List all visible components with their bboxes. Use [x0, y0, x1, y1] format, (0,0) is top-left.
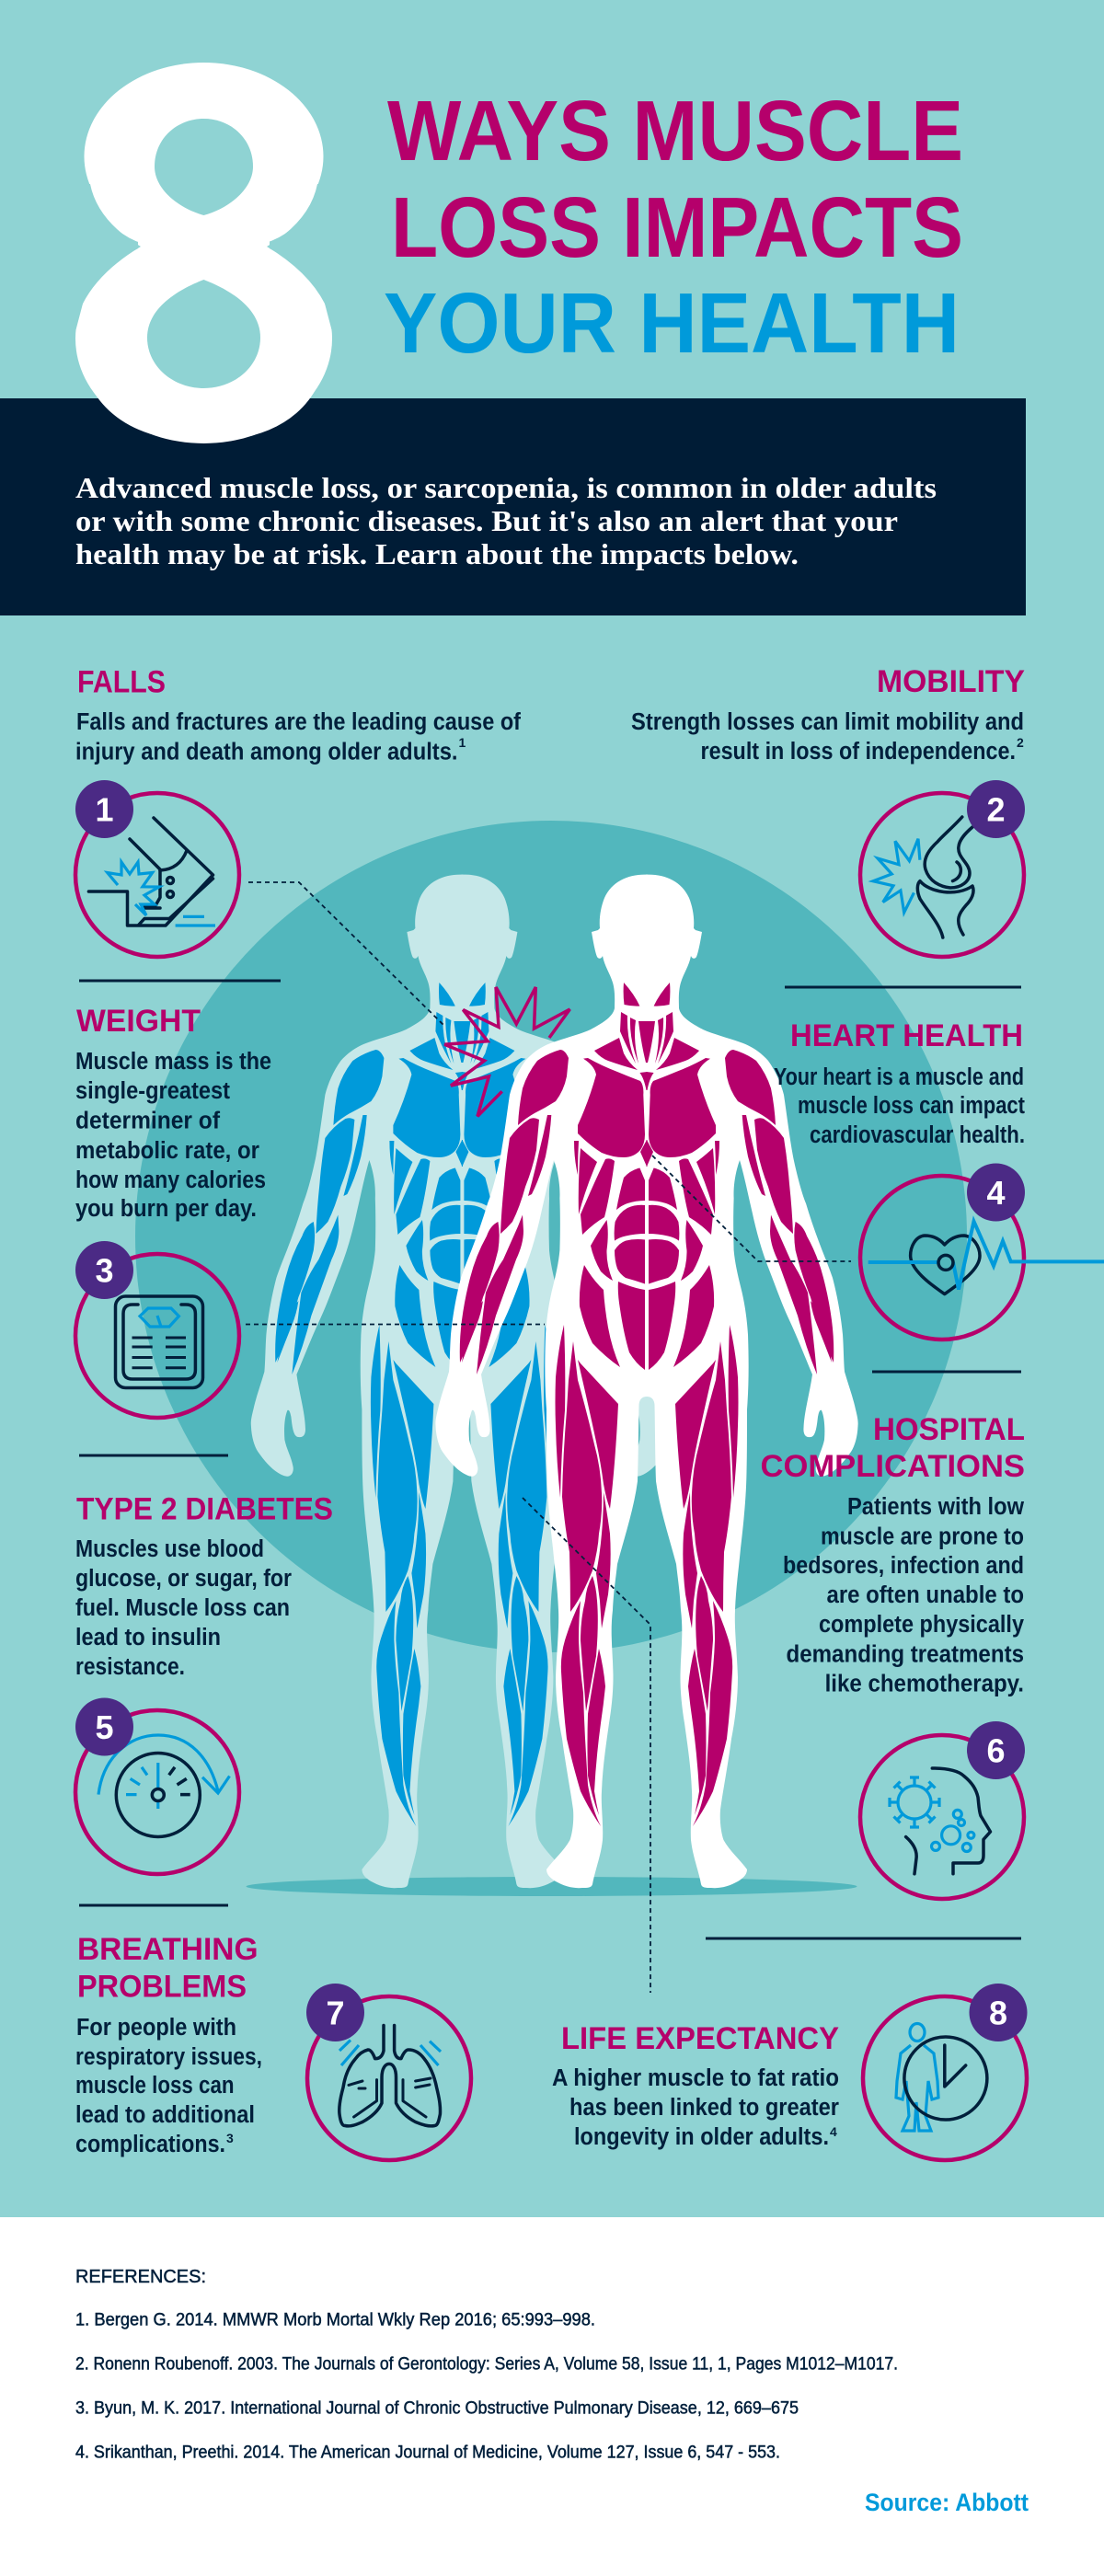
text: type 2 diabetes: resistance.	[75, 1654, 185, 1680]
text: life expectancy: 4	[830, 2124, 837, 2139]
heading: hospital complications	[760, 1412, 1025, 1484]
heading: mobility: MOBILITY	[877, 664, 1025, 699]
panel: type 2 diabetes	[75, 1492, 333, 1874]
title: YOUR HEALTH	[384, 275, 960, 371]
heading: heart health: HEART HEALTH	[790, 1018, 1023, 1053]
panel: falls	[75, 664, 521, 957]
intro text: or with some chronic diseases. But it's also an alert that your	[75, 504, 898, 537]
text: mobility: result in loss of independence.	[701, 739, 1016, 765]
panel: mobility	[631, 664, 1025, 957]
text: weight: Muscle mass is the	[75, 1049, 271, 1075]
heading: weight: WEIGHT	[76, 1004, 201, 1039]
heading: life expectancy: LIFE EXPECTANCY	[561, 2021, 839, 2056]
title: WAYS MUSCLE	[387, 83, 963, 178]
figure: magenta muscular body	[435, 875, 858, 1888]
icon: gauge	[75, 1698, 239, 1874]
text: falls	[75, 709, 521, 765]
icon: person and clock	[863, 1984, 1027, 2160]
text: type 2 diabetes: Muscles use blood	[75, 1536, 264, 1562]
text: life expectancy: has been linked to greater	[569, 2095, 839, 2121]
text: weight: how many calories	[75, 1167, 266, 1193]
icon: gauge: 5	[95, 1708, 114, 1746]
text: breathing problems	[75, 2015, 262, 2157]
text: hospital complications: like chemotherapy.	[825, 1672, 1024, 1697]
text: mobility	[631, 709, 1024, 765]
connector: falls	[248, 882, 443, 1025]
text: falls: 1	[458, 735, 466, 750]
references heading: REFERENCES:	[75, 2266, 206, 2287]
panel: life expectancy	[552, 1984, 1027, 2160]
intro text: Advanced muscle loss, or sarcopenia, is common in older adults	[75, 471, 937, 504]
text: weight: you burn per day.	[75, 1196, 257, 1222]
text: breathing problems: For people with	[76, 2015, 236, 2041]
icon: person and clock: 8	[989, 1995, 1007, 2031]
source credit: Source: Abbott	[865, 2489, 1029, 2516]
text: falls: injury and death among older adults.	[75, 740, 458, 765]
reference list: 3. Byun, M. K. 2017. International Journal of Chronic Obstructive Pulmonary Disease, 12, 669–675	[75, 2398, 799, 2419]
icon: head with virus: 6	[986, 1731, 1006, 1770]
intro text: health may be at risk. Learn about the impacts below.	[75, 537, 799, 570]
text: heart health: Your heart is a muscle and	[774, 1064, 1024, 1090]
text: mobility: 2	[1017, 735, 1024, 750]
text: hospital complications: are often unable to	[826, 1582, 1024, 1608]
text: heart health	[774, 1064, 1025, 1148]
intro band	[0, 398, 1026, 615]
reference list: 1. Bergen G. 2014. MMWR Morb Mortal Wkly Rep 2016; 65:993–998.	[75, 2310, 595, 2330]
text: type 2 diabetes	[75, 1536, 292, 1680]
divider	[785, 986, 1021, 988]
icon: lungs: 7	[326, 1995, 345, 2031]
text: type 2 diabetes: glucose, or sugar, for	[75, 1566, 292, 1592]
text: hospital complications: demanding treatments	[786, 1641, 1024, 1667]
figure: blue muscular body	[251, 875, 673, 1888]
divider	[872, 1371, 1021, 1373]
icon: weighing scale	[75, 1241, 239, 1418]
text: breathing problems: respiratory issues,	[75, 2044, 262, 2070]
heading: hospital complications: COMPLICATIONS	[760, 1449, 1025, 1484]
text: life expectancy: longevity in older adults.	[574, 2124, 829, 2150]
icon: knee joint: 2	[986, 791, 1006, 828]
text: hospital complications: Patients with low	[847, 1494, 1024, 1520]
reference list: 4. Srikanthan, Preethi. 2014. The American Journal of Medicine, Volume 127, Issue 6, 547 - 553.	[75, 2443, 780, 2463]
text: breathing problems: lead to additional	[75, 2102, 255, 2128]
text: breathing problems: muscle loss can	[75, 2073, 234, 2099]
text: hospital complications: muscle are prone to	[821, 1524, 1024, 1549]
text: weight: single-greatest	[75, 1078, 230, 1104]
panel: weight	[75, 1004, 271, 1418]
connector: life expectancy	[523, 1498, 650, 1993]
text: weight	[75, 1049, 271, 1222]
icon: weighing scale: 3	[95, 1251, 114, 1290]
heading: type 2 diabetes: TYPE 2 DIABETES	[76, 1492, 333, 1527]
panel: heart health	[774, 1018, 1104, 1340]
text: falls: Falls and fractures are the leading cause of	[76, 709, 521, 735]
divider	[79, 1904, 228, 1906]
icon: foot slipping on step	[75, 780, 239, 957]
text: weight: metabolic rate, or	[75, 1138, 259, 1164]
text: mobility: Strength losses can limit mobility and	[631, 709, 1024, 735]
panel: hospital complications	[760, 1412, 1025, 1899]
big background circle	[135, 821, 967, 1652]
icon: heart with pulse line	[860, 1163, 1104, 1340]
heading: breathing problems: BREATHING	[77, 1932, 258, 1967]
reference list	[75, 2310, 898, 2463]
text: type 2 diabetes: fuel. Muscle loss can	[75, 1595, 290, 1621]
text: hospital complications	[783, 1494, 1025, 1697]
text: breathing problems: 3	[226, 2131, 234, 2145]
connector: weight	[246, 1323, 545, 1325]
title: LOSS IMPACTS	[391, 179, 963, 275]
icon: heart with pulse line: 4	[986, 1174, 1006, 1212]
intro text	[75, 471, 937, 570]
floor shadow	[247, 1877, 857, 1896]
icon: lungs	[306, 1984, 471, 2160]
text: weight: determiner of	[75, 1108, 220, 1133]
icon: knee joint	[860, 780, 1025, 957]
text: heart health: muscle loss can impact	[798, 1093, 1025, 1119]
connector: heart health	[652, 1156, 851, 1261]
divider	[79, 979, 281, 983]
heading: hospital complications: HOSPITAL	[873, 1412, 1025, 1447]
text: heart health: cardiovascular health.	[810, 1122, 1025, 1148]
text: life expectancy	[552, 2065, 839, 2150]
heading: breathing problems	[77, 1932, 258, 2004]
divider	[706, 1938, 1021, 1939]
text: life expectancy: A higher muscle to fat ratio	[552, 2065, 839, 2091]
divider	[79, 1454, 228, 1457]
heading: breathing problems: PROBLEMS	[77, 1969, 247, 2004]
heading: falls: FALLS	[77, 664, 166, 699]
panel: references	[0, 2217, 1104, 2576]
panel: breathing problems	[75, 1932, 471, 2160]
text: type 2 diabetes: lead to insulin	[75, 1625, 221, 1650]
text: hospital complications: bedsores, infection and	[783, 1553, 1024, 1579]
text: breathing problems: complications.	[75, 2132, 225, 2157]
text: hospital complications: complete physically	[819, 1612, 1025, 1638]
pain burst on neck	[444, 987, 569, 1116]
icon: head with virus	[860, 1721, 1025, 1899]
reference list: 2. Ronenn Roubenoff. 2003. The Journals of Gerontology: Series A, Volume 58, Issue 11, 1, Pages M1012–M1017.	[75, 2354, 898, 2375]
title	[384, 83, 963, 371]
icon: foot slipping on step: 1	[95, 791, 114, 828]
